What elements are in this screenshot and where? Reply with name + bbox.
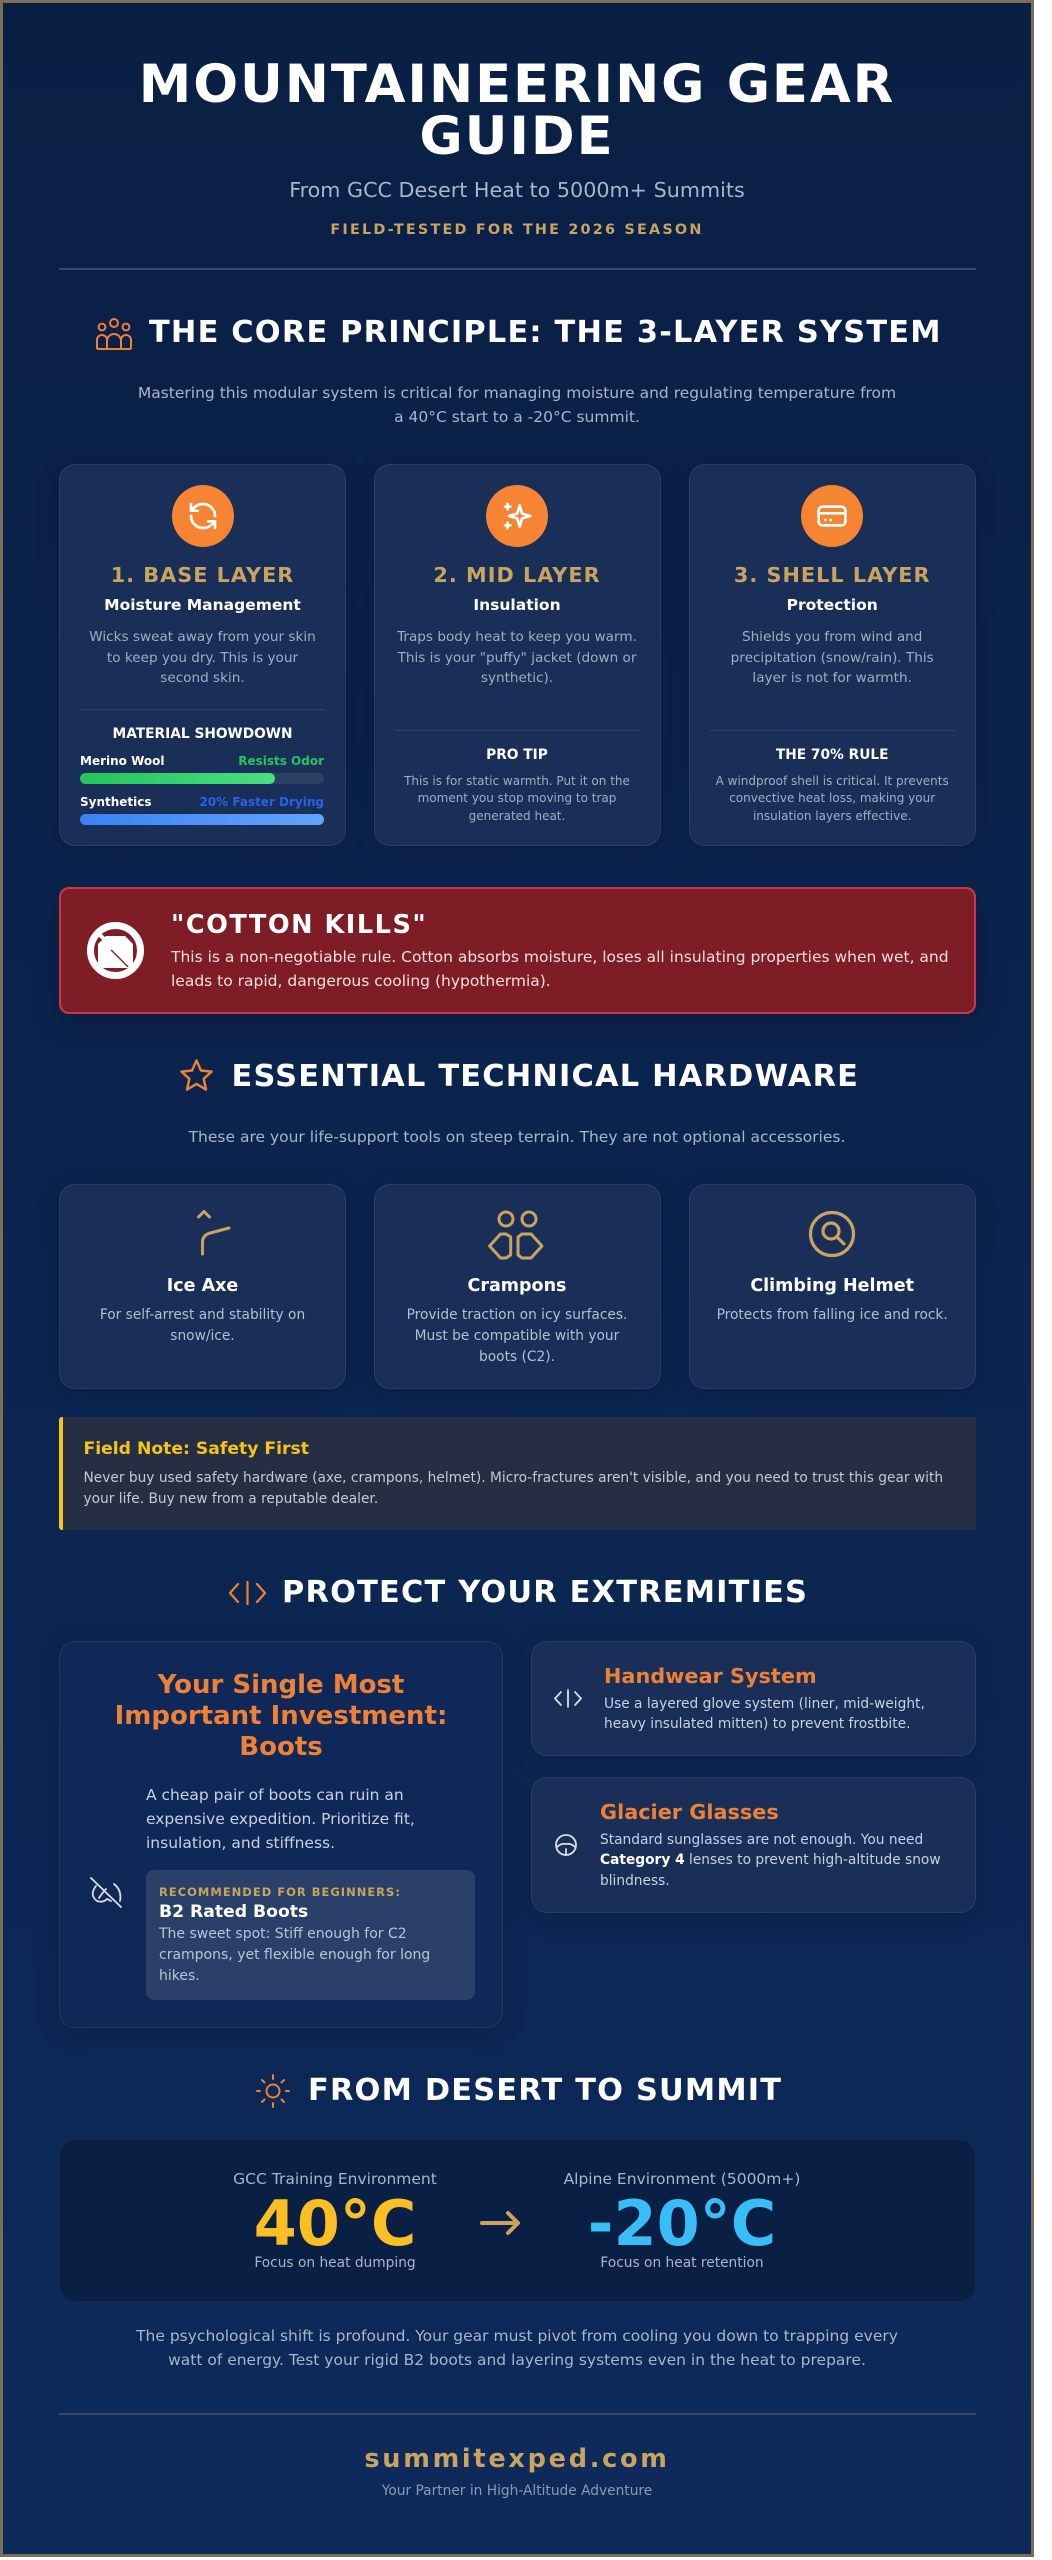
boots text [146,1786,415,1852]
bar chart: synthetics: Synthetics [80,795,152,809]
intro text: layers [138,384,896,426]
stat: desert: Focus on heat dumping [254,2255,416,2271]
rule heading: THE 70% RULE [776,747,889,763]
icon: sparkles [486,485,548,547]
heading: extremities: PROTECT YOUR EXTREMITIES [282,1575,808,1610]
description: Traps body heat to keep you warm. [397,629,637,645]
gear text [407,1307,627,1365]
description: precipitation (snow/rain). This [731,650,934,666]
gear text: Protects from falling ice and rock. [717,1307,948,1323]
icon: boots [90,1877,122,1908]
icon: glasses [555,1834,577,1856]
tip text: This is for static warmth. Put it on the [404,774,630,788]
icon: handwear [554,1689,582,1708]
description [397,629,637,686]
footer: site name: summitexped.com [364,2444,670,2474]
callout: cotton kills [59,887,976,1014]
note text: Never buy used safety hardware (axe, crampons, helmet). Micro-fractures aren't visible, and you need to trust this gear with [84,1470,943,1486]
bar chart: merino wool: Resists Odor [238,754,324,768]
gear text: Must be compatible with your [415,1328,619,1344]
description: second skin. [160,670,245,686]
icon: helmet [808,1210,856,1258]
glasses text: blindness. [600,1873,670,1889]
gear name: Climbing Helmet [750,1276,914,1296]
description [731,629,934,686]
title [139,54,895,167]
description [89,629,316,686]
glasses text: Category 4 lenses to prevent high-altitude snow [600,1852,941,1868]
description: Shields you from wind and [742,629,922,645]
gear text: For self-arrest and stability on [100,1307,305,1323]
recommendation text: crampons, yet flexible enough for long [159,1947,430,1963]
icon: chevrons [228,1580,266,1606]
recommendation name: B2 Rated Boots [159,1902,308,1922]
season tagline: FIELD-TESTED FOR THE 2026 SEASON [330,222,704,238]
intro text: layers: a 40°C start to a -20°C summit. [394,408,640,426]
title: MOUNTAINEERING GEAR [139,54,895,115]
tip text [404,774,630,823]
stat: alpine: -20°C [588,2186,776,2260]
description: synthetic). [481,670,553,686]
layer name: 1. BASE LAYER [111,563,294,587]
gear text [100,1307,305,1344]
panel: ice axe [59,1184,346,1389]
note heading: Field Note: Safety First [84,1439,309,1459]
stat: alpine: Alpine Environment (5000m+) [564,2170,800,2188]
panel: temperature comparison [59,2139,976,2302]
panel: shell layer [689,464,976,846]
glasses text: Standard sunglasses are not enough. You need [600,1832,923,1848]
rule text: A windproof shell is critical. It prevents [716,774,949,788]
recommendation box [146,1870,475,2000]
material showdown heading: MATERIAL SHOWDOWN [113,726,292,742]
panel: boots [59,1641,503,2028]
layer name: 3. SHELL LAYER [734,563,930,587]
boots title: Your Single Most [158,1670,404,1700]
arrow [480,2210,520,2236]
icon: star [180,1059,213,1091]
boots text: insulation, and stiffness. [146,1834,335,1852]
panel: handwear [531,1641,976,1756]
intro text: hardware: These are your life-support tools on steep terrain. They are not optional accessories. [189,1128,845,1146]
note text: your life. Buy new from a reputable dealer. [84,1491,378,1507]
description: layer is not for warmth. [752,670,912,686]
subtitle: From GCC Desert Heat to 5000m+ Summits [289,178,745,202]
heading: core principle: THE CORE PRINCIPLE: THE 3-LAYER SYSTEM [149,315,942,350]
stat: alpine [564,2170,800,2271]
bar chart: synthetics [80,795,324,825]
icon: refresh [172,485,234,547]
icon: sun [256,2074,290,2108]
gear name: Crampons [468,1276,566,1296]
bar chart: merino wool: Merino Wool [80,754,164,768]
stat: desert: GCC Training Environment [233,2170,437,2188]
callout: field note [58,1417,976,1530]
description: This is your "puffy" jacket (down or [398,650,636,666]
handwear text [604,1696,925,1732]
panel: base layer [59,464,346,846]
title: GUIDE [419,106,615,167]
recommendation label: RECOMMENDED FOR BEGINNERS: [159,1885,401,1899]
gear name: Ice Axe [167,1276,238,1296]
boots title [115,1670,447,1762]
bar chart: synthetics: 20% Faster Drying [199,795,324,809]
boots text: expensive expedition. Prioritize fit, [146,1810,415,1828]
boots title: Boots [239,1732,323,1762]
callout text: This is a non-negotiable rule. Cotton absorbs moisture, loses all insulating properties when wet, and [171,948,949,966]
icon: ice axe [196,1210,230,1256]
glasses title: Glacier Glasses [600,1800,779,1824]
rule text [716,774,949,823]
description: Wicks sweat away from your skin [89,629,316,645]
bar chart: merino wool [80,754,324,784]
layer purpose: Moisture Management [104,596,301,614]
stat: desert: 40°C [254,2186,416,2260]
panel: mid layer [374,464,660,846]
callout text [170,948,949,990]
intro text: layers: Mastering this modular system is critical for managing moisture and regulating temperature from [138,384,896,402]
heading: desert to summit: FROM DESERT TO SUMMIT [308,2073,782,2108]
panel: glacier glasses [531,1777,976,1913]
gear text: snow/ice. [170,1328,235,1344]
heading: hardware: ESSENTIAL TECHNICAL HARDWARE [232,1059,859,1094]
note text [84,1470,943,1507]
tip heading: PRO TIP [486,747,548,763]
recommendation text: The sweet spot: Stiff enough for C2 [159,1926,407,1942]
icon: crampons [488,1210,544,1260]
callout title: "COTTON KILLS" [171,910,427,940]
stat: alpine: Focus on heat retention [600,2255,764,2271]
layer purpose: Insulation [473,596,561,614]
glasses text [600,1832,941,1889]
gear text: Provide traction on icy surfaces. [407,1307,627,1323]
handwear title: Handwear System [604,1664,817,1688]
recommendation text: hikes. [159,1968,200,1984]
boots text: A cheap pair of boots can ruin an [146,1786,404,1804]
rule text: convective heat loss, making your [729,791,935,805]
boots title: Important Investment: [115,1701,447,1731]
description: to keep you dry. This is your [107,650,298,666]
handwear text: Use a layered glove system (liner, mid-weight, [604,1696,925,1712]
footer: tagline: Your Partner in High-Altitude Adventure [382,2483,652,2499]
closing text: The psychological shift is profound. Your gear must pivot from cooling you down to trapping every [136,2327,898,2345]
rule text: insulation layers effective. [753,809,911,823]
recommendation text [158,1926,430,1984]
icon: no cotton [87,922,144,979]
layer purpose: Protection [787,596,878,614]
stat: desert [233,2170,437,2271]
layer name: 2. MID LAYER [433,563,601,587]
closing text: watt of energy. Test your rigid B2 boots and layering systems even in the heat to prepare. [168,2351,866,2369]
tip text: moment you stop moving to trap [418,791,616,805]
callout text: leads to rapid, dangerous cooling (hypothermia). [171,972,551,990]
gear text: boots (C2). [479,1349,555,1365]
closing text [136,2327,898,2369]
icon: card [801,485,863,547]
handwear text: heavy insulated mitten) to prevent frostbite. [604,1716,910,1732]
panel: helmet [689,1184,976,1389]
panel: crampons [374,1184,660,1389]
tip text: generated heat. [469,809,565,823]
icon: people [96,318,132,350]
